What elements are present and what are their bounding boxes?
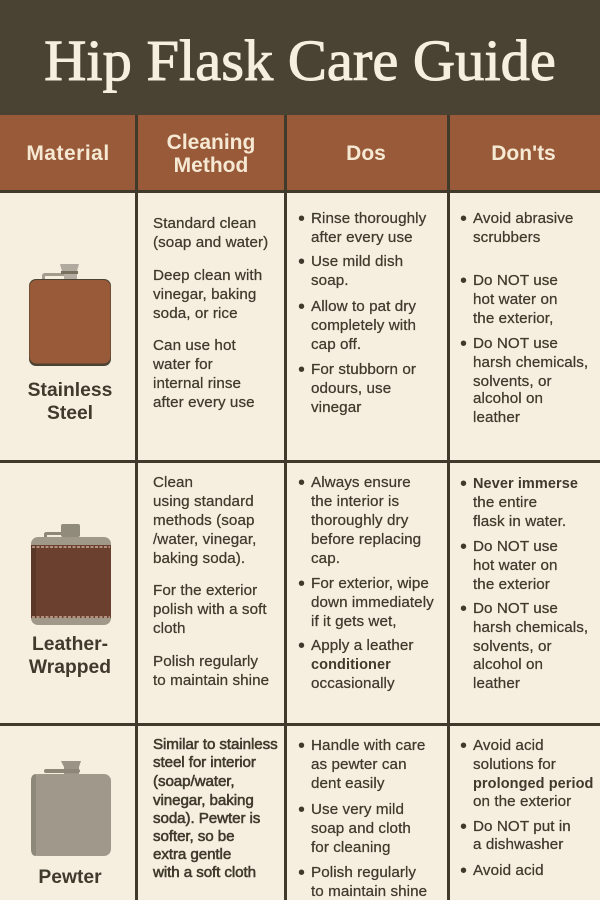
text: thoroughly dry — [311, 512, 408, 529]
text: vinegar, baking — [153, 286, 256, 303]
text: /water, vinegar, — [153, 531, 256, 548]
text: Do NOT use — [473, 538, 558, 555]
text: vinegar — [311, 399, 361, 416]
text: the exterior, — [473, 310, 553, 327]
label: leather-wrapped: Leather- — [32, 634, 108, 655]
text: hot water on — [473, 291, 558, 308]
text: soap and cloth — [311, 820, 411, 837]
text: steel for interior — [153, 754, 256, 771]
text: polish with a soft — [153, 601, 267, 618]
text: • — [298, 208, 305, 230]
text: (soap and water) — [153, 234, 268, 251]
label: pewter: Pewter — [38, 867, 102, 888]
header: material: Material — [26, 142, 110, 165]
text: as pewter can — [311, 756, 407, 773]
text: • — [460, 735, 467, 757]
text: leather — [473, 675, 520, 692]
text: soap. — [311, 272, 349, 289]
text: scrubbers — [473, 229, 540, 246]
label: leather-wrapped — [28, 634, 111, 678]
text: flask in water. — [473, 513, 566, 530]
text: the interior is — [311, 493, 399, 510]
row 3 dos — [298, 735, 427, 900]
text: • — [460, 473, 467, 495]
text: Apply a leather — [311, 637, 414, 654]
text: Handle with care — [311, 737, 425, 754]
text: Can use hot — [153, 337, 236, 354]
icon: pewter flask — [31, 761, 111, 856]
text: for cleaning — [311, 839, 390, 856]
text: conditioner — [311, 657, 391, 673]
text: vinegar, baking — [153, 792, 254, 809]
text: Allow to pat dry — [311, 298, 416, 315]
text: cloth — [153, 620, 185, 637]
text: • — [460, 816, 467, 838]
row 1 don'ts — [460, 208, 588, 426]
text: • — [298, 799, 305, 821]
row 2 cleaning method — [152, 474, 269, 689]
text: internal rinse — [153, 375, 241, 392]
text: the entire — [473, 494, 537, 511]
row 1 dos — [298, 208, 426, 416]
text: cap. — [311, 550, 340, 567]
label: stainless steel: Steel — [47, 403, 93, 424]
title banner — [0, 0, 600, 115]
text: • — [460, 598, 467, 620]
text: Polish regularly — [153, 653, 258, 670]
text: down immediately — [311, 594, 434, 611]
text: completely with — [311, 317, 416, 334]
text: Use very mild — [311, 801, 404, 818]
row 3 cleaning method — [152, 736, 278, 881]
text: For stubborn or — [311, 361, 416, 378]
text: Clean — [153, 474, 193, 491]
text: • — [298, 296, 305, 318]
text: leather — [473, 409, 520, 426]
text: baking soda). — [153, 550, 245, 567]
text: • — [298, 472, 305, 494]
header: cleaning method: Method — [174, 154, 248, 177]
row 2 don'ts — [460, 473, 588, 692]
label: stainless steel — [28, 380, 112, 424]
text: Rinse thoroughly — [311, 210, 426, 227]
text: after every use — [311, 229, 413, 246]
header: don'ts: Don'ts — [491, 142, 556, 165]
text: • — [298, 359, 305, 381]
text: Avoid acid — [473, 737, 544, 754]
text: Standard clean — [153, 215, 256, 232]
text: solvents, or — [473, 373, 552, 390]
header: dos: Dos — [346, 142, 386, 165]
text: methods (soap — [153, 512, 255, 529]
table header row — [0, 115, 600, 191]
label: leather-wrapped: Wrapped — [29, 657, 111, 678]
text: • — [298, 635, 305, 657]
text: Never immerse — [473, 476, 578, 492]
text: Polish regularly — [311, 864, 416, 881]
text: the exterior — [473, 576, 550, 593]
text: to maintain shine — [311, 883, 427, 900]
text: a dishwasher — [473, 836, 563, 853]
text: • — [298, 735, 305, 757]
text: • — [298, 251, 305, 273]
row 2 dos — [298, 472, 434, 692]
text: solutions for — [473, 756, 556, 773]
icon: stainless steel flask — [29, 264, 111, 366]
row 1 cleaning method — [152, 215, 268, 411]
row 3 don'ts — [460, 735, 594, 882]
text: alcohol on — [473, 390, 543, 407]
text: Avoid acid — [473, 862, 544, 879]
text: Do NOT use — [473, 335, 558, 352]
text: solvents, or — [473, 638, 552, 655]
text: softer, so be — [153, 828, 234, 845]
text: Always ensure — [311, 474, 411, 491]
text: with a soft cloth — [153, 864, 256, 881]
text: • — [298, 573, 305, 595]
text: harsh chemicals, — [473, 619, 588, 636]
text: • — [460, 208, 467, 230]
text: For the exterior — [153, 582, 257, 599]
text: occasionally — [311, 675, 395, 692]
text: Do NOT use — [473, 272, 558, 289]
text: • — [460, 536, 467, 558]
text: Similar to stainless — [153, 736, 278, 753]
text: to maintain shine — [153, 672, 269, 689]
text: • — [460, 333, 467, 355]
text: harsh chemicals, — [473, 354, 588, 371]
text: • — [460, 270, 467, 292]
header: cleaning method: Cleaning — [167, 131, 255, 154]
text: Do NOT put in — [473, 818, 571, 835]
text: using standard — [153, 493, 254, 510]
text: hot water on — [473, 557, 558, 574]
text: after every use — [153, 394, 255, 411]
text: extra gentle — [153, 846, 231, 863]
text: water for — [153, 356, 213, 373]
icon: leather-wrapped flask — [31, 524, 111, 625]
text: soda). Pewter is — [153, 810, 260, 827]
text: cap off. — [311, 336, 361, 353]
header: cleaning method — [167, 131, 255, 177]
text: dent easily — [311, 775, 384, 792]
text: (soap/water, — [153, 773, 235, 790]
text: if it gets wet, — [311, 613, 397, 630]
text: before replacing — [311, 531, 421, 548]
text: Do NOT use — [473, 600, 558, 617]
title: Hip Flask Care Guide — [44, 28, 556, 93]
text: Avoid abrasive — [473, 210, 573, 227]
text: alcohol on — [473, 656, 543, 673]
text: prolonged period — [473, 776, 594, 792]
label: stainless steel: Stainless — [28, 380, 112, 401]
text: on the exterior — [473, 793, 571, 810]
text: Deep clean with — [153, 267, 262, 284]
text: odours, use — [311, 380, 391, 397]
text: Use mild dish — [311, 253, 403, 270]
text: • — [460, 860, 467, 882]
text: For exterior, wipe — [311, 575, 429, 592]
text: soda, or rice — [153, 305, 238, 322]
text: • — [298, 862, 305, 884]
